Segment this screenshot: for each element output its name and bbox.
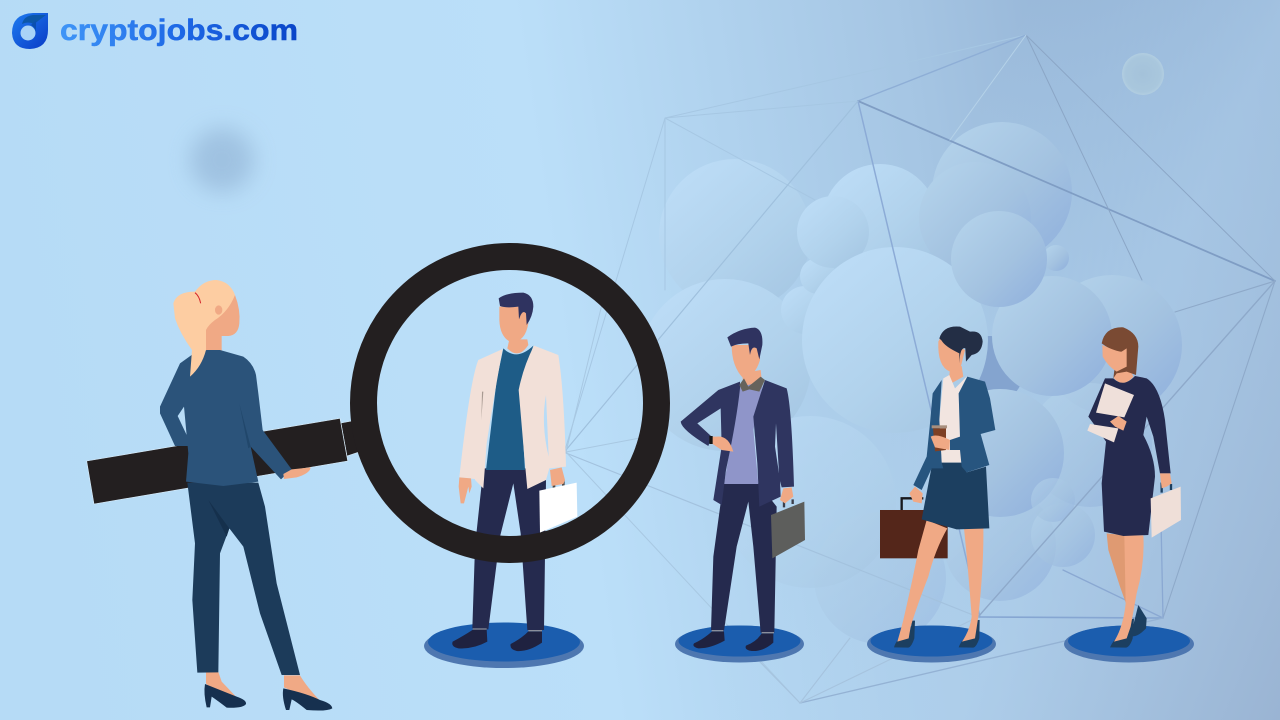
candidate 4: woman in navy dress xyxy=(1087,327,1181,648)
logo wordmark: cryptojobs.com xyxy=(60,14,298,47)
hair tie xyxy=(195,293,201,303)
trousers xyxy=(711,483,777,633)
hair and ponytail xyxy=(173,280,235,377)
bag handle xyxy=(784,497,793,507)
hand on hip xyxy=(712,437,733,452)
trousers xyxy=(472,468,546,630)
back heel xyxy=(1132,605,1147,637)
shoes xyxy=(693,631,774,651)
neck xyxy=(206,327,222,351)
hand xyxy=(283,467,311,479)
neck xyxy=(743,370,762,388)
trousers xyxy=(187,483,300,675)
shoes xyxy=(452,629,542,651)
jacket xyxy=(459,346,566,489)
feet xyxy=(206,672,320,701)
sphere cluster xyxy=(639,122,1182,644)
ear xyxy=(215,305,222,315)
hair xyxy=(1102,327,1138,378)
dress xyxy=(1088,376,1171,536)
trouser fold xyxy=(208,500,229,537)
candidate 1: man in cream jacket xyxy=(452,293,577,651)
candidate 3: woman in blue skirt suit xyxy=(880,326,995,648)
right hand xyxy=(1160,473,1172,488)
legs xyxy=(897,520,983,642)
recruiter woman holding magnifier xyxy=(160,280,332,711)
face xyxy=(207,295,240,336)
hand on documents xyxy=(1110,416,1127,431)
front heel xyxy=(1110,619,1134,648)
skirt xyxy=(922,463,989,529)
back leg xyxy=(1107,533,1126,603)
bag handle xyxy=(1162,482,1171,493)
hair xyxy=(939,326,983,363)
heels xyxy=(204,684,332,711)
top xyxy=(160,350,292,486)
small pale orb xyxy=(1122,53,1164,95)
icon: logo drop xyxy=(12,13,48,49)
bag handle xyxy=(554,478,563,489)
sweater xyxy=(724,382,763,484)
hand with cup xyxy=(931,436,950,450)
platform: candidate 2 xyxy=(675,626,804,662)
head xyxy=(732,345,760,378)
t-shirt xyxy=(486,346,533,470)
heels xyxy=(894,620,980,648)
blazer xyxy=(681,380,794,507)
blurred background orb xyxy=(190,128,254,192)
magnifying glass ring xyxy=(364,256,656,550)
collar xyxy=(739,377,765,392)
sleeve fold xyxy=(239,403,251,448)
neck xyxy=(1114,365,1133,383)
hand with case xyxy=(909,487,923,503)
blazer xyxy=(913,377,995,490)
right hand xyxy=(780,487,793,503)
coffee cup xyxy=(932,425,947,451)
platform: candidate 4 xyxy=(1064,626,1194,662)
neck xyxy=(507,339,528,353)
hair xyxy=(499,293,533,325)
hands xyxy=(459,477,472,503)
right hand xyxy=(550,467,565,486)
documents xyxy=(1087,383,1134,442)
wireframe polyhedron xyxy=(565,35,1275,703)
neck xyxy=(948,366,963,385)
hair xyxy=(727,328,762,359)
head xyxy=(499,307,528,342)
head xyxy=(938,338,965,372)
platform: candidate 1 xyxy=(424,622,584,668)
cream bag xyxy=(1151,487,1181,538)
grey briefcase xyxy=(771,502,805,558)
front leg xyxy=(1114,535,1144,642)
head xyxy=(1102,345,1127,372)
magnifying glass handle xyxy=(87,418,368,504)
brown briefcase xyxy=(880,498,948,558)
shirt xyxy=(939,375,967,463)
platform: candidate 3 xyxy=(867,626,996,662)
watch xyxy=(709,436,713,444)
white shopping bag xyxy=(539,483,577,533)
logo xyxy=(12,13,298,49)
candidate 2: man in navy blazer xyxy=(681,328,805,651)
